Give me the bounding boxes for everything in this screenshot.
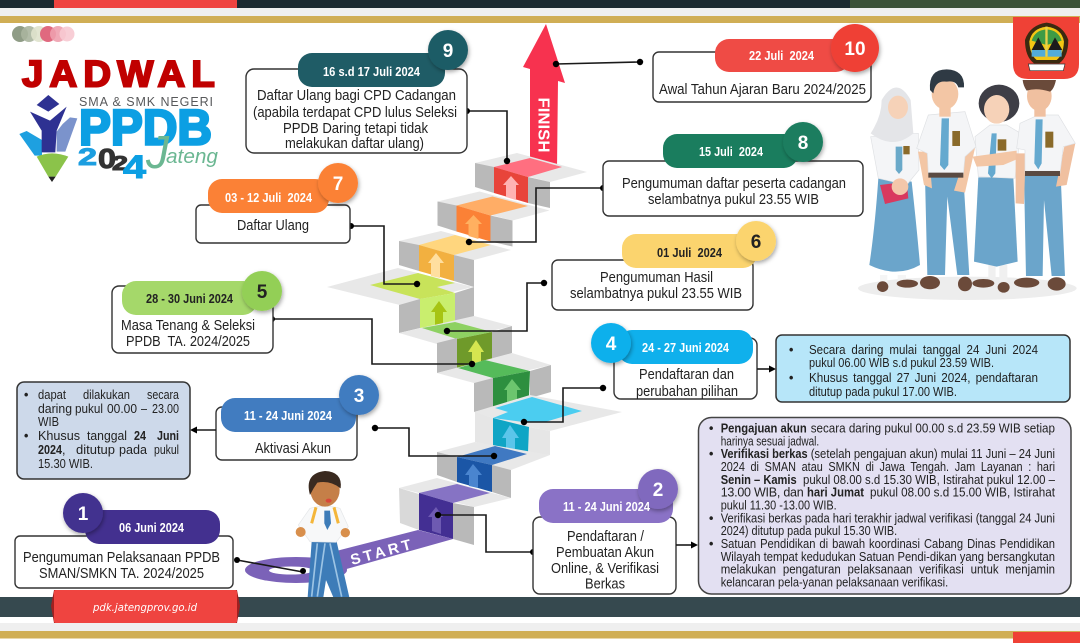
step blue (437, 442, 550, 498)
step 6 card (552, 221, 776, 310)
step 5 card: Masa Tenang & Seleksi (121, 318, 255, 334)
step 1 card: Pengumuman Pelaksanaan PPDB (23, 550, 220, 566)
start label: START (349, 536, 413, 569)
connector 1 (234, 557, 306, 574)
step 9 card: melakukan daftar ulang) (285, 136, 424, 152)
panel: step 3 details: pukul (154, 443, 179, 457)
panel: step 4 details: ditutup pada pukul 17.00 WIB. (809, 385, 957, 399)
panel: step 3 details: dapat (38, 388, 66, 402)
step 2 card: Pendaftaran / (567, 529, 645, 545)
panel: step 3 details: • (24, 429, 28, 443)
panel: step 2 details: pukul 08.00 s.d 15.30 WIB, Istirahat pukul 12.00 – (803, 473, 1055, 487)
panel: step 2 details: 13.00 WIB, dan (721, 486, 804, 500)
step 8 card: 15 Juli 2024 (699, 145, 763, 159)
arrow: step 3 to details (190, 426, 216, 434)
bottom footer bar (0, 590, 1080, 643)
step 5 card (112, 271, 282, 353)
title: JADWAL: JADWAL (22, 54, 221, 94)
panel: step 3 details: 24 (134, 429, 146, 443)
emblem tab: Jawa Tengah (1013, 17, 1079, 79)
step purple (399, 478, 511, 545)
step 4 card: 4 (606, 334, 617, 355)
panel: step 2 details: • (709, 537, 713, 551)
step 6 card: 6 (751, 232, 761, 253)
website tab (51, 590, 240, 623)
panel: step 3 details: Juni (157, 429, 179, 443)
panel: step 2 details: Senin – Kamis (721, 473, 797, 487)
step 10 card: Awal Tahun Ajaran Baru 2024/2025 (659, 82, 866, 98)
girl student (972, 85, 1021, 293)
step 10 card (653, 24, 879, 102)
step 7 card (196, 163, 358, 243)
boy student (917, 69, 976, 291)
step 1 card: SMAN/SMKN TA. 2024/2025 (39, 566, 204, 582)
connector 5 (269, 316, 475, 367)
step 4 card: 24 - 27 Juni 2024 (642, 341, 729, 355)
step green (437, 353, 551, 412)
step orange (438, 192, 550, 246)
step 2 card: Pembuatan Akun (556, 545, 654, 561)
step 4 card: perubahan pilihan (636, 384, 738, 400)
panel: step 3 details: Khusus (38, 429, 80, 443)
step red (475, 153, 587, 208)
step yellow (399, 231, 511, 287)
panel: step 3 details: 2024 (38, 443, 62, 457)
panel: step 2 details: (setelah pengajuan akun) mulai 11 Juni – 24 Juni (811, 447, 1055, 461)
panel: step 2 details: Verifikasi berkas (721, 447, 808, 461)
connector 3 (372, 425, 497, 459)
logo year 2024 (78, 143, 146, 185)
connector 7 (348, 223, 420, 287)
panel: step 2 details: • (709, 422, 713, 436)
step 3 card: Aktivasi Akun (255, 441, 331, 457)
step 2 card: Berkas (585, 576, 625, 592)
panel: step 3 details: WIB (38, 415, 59, 429)
connector 6 (444, 280, 547, 334)
step 7 card: 03 - 12 Juli 2024 (225, 191, 312, 205)
step 6 card: 01 Juli 2024 (657, 246, 722, 260)
panel: step 2 details: • (709, 511, 713, 525)
panel: step 4 details: • (789, 343, 793, 357)
panel: step 3 details: ditutup (76, 443, 115, 457)
website tab: pdk.jatengprov.go.id (92, 602, 197, 614)
panel: step 2 details: • (709, 447, 713, 461)
panel: step 3 details: 00.00 (107, 402, 137, 416)
panel: step 4 details (776, 335, 1070, 402)
connector 4 (521, 385, 606, 425)
subtitle: SMA & SMK Negeri: SMA & SMK NEGERI (79, 95, 213, 109)
connector 9 (464, 108, 510, 164)
panel: step 4 details: • (789, 371, 793, 385)
step olive (399, 316, 512, 373)
logo: Jadwal PPDB 2024 Jateng (19, 54, 221, 185)
staircase (327, 24, 622, 545)
step 1 card (15, 493, 233, 588)
panel: step 2 details: melakukan pengaturan pelaksanaan verifikasi untuk menjamin (721, 563, 1055, 577)
decorative dots (12, 26, 74, 42)
student walking figure (296, 471, 350, 597)
connector 8 (466, 185, 606, 245)
step cyan (474, 395, 622, 455)
panel: step 3 details (17, 382, 190, 479)
step 8 card (603, 122, 863, 216)
panel: step 3 details: daring (38, 402, 72, 416)
logo icon: graduates pencil (19, 95, 77, 182)
panel: step 3 details: tanggal (87, 429, 127, 443)
panel: step 4 details: pukul 06.00 WIB s.d pukul 23.59 WIB. (809, 356, 994, 370)
arrow: step 4 to details (757, 366, 776, 372)
step 8 card: 8 (798, 133, 808, 154)
panel: step 3 details: pada (119, 443, 147, 457)
arrow: step 2 to details (676, 542, 698, 548)
step 9 card: 9 (443, 41, 453, 62)
panel: step 3 details: – (141, 402, 147, 416)
step 5 card: PPDB TA. 2024/2025 (126, 334, 250, 350)
student with hijab (869, 87, 920, 292)
step 6 card: selambatnya pukul 23.55 WIB (570, 286, 742, 302)
logo word PPDB: PPDB (79, 100, 212, 156)
finish label: FINISH (534, 98, 552, 152)
panel: step 2 details: hari Jumat (807, 486, 865, 500)
panel: step 4 details: Khusus tanggal 27 Juni 2024, pendaftaran (809, 371, 1038, 385)
step 10 card: 22 Juli 2024 (749, 49, 814, 63)
logo script Jateng: ateng (166, 146, 218, 168)
panel: step 3 details: dilakukan (83, 388, 130, 402)
logo year 2024: 4 (123, 149, 146, 185)
connector 2 (435, 512, 536, 555)
step 3 card: 3 (354, 386, 364, 407)
step 4 card (591, 323, 757, 400)
logo year 2024: 2 (112, 153, 128, 175)
step 9 card: Daftar Ulang bagi CPD Cadangan (257, 88, 456, 104)
panel: step 3 details: secara (147, 388, 179, 402)
panel: step 3 details: pukul (75, 402, 103, 416)
panel: step 2 details: Pengajuan akun (721, 422, 807, 436)
panel: step 2 details: 2024) ditutup pada pukul 15.30 WIB. (721, 524, 897, 538)
connector lines (234, 59, 643, 574)
step 9 card (246, 30, 468, 153)
panel: step 2 details: pukul 08.00 s.d 15.00 WIB, Istirahat (870, 486, 1055, 500)
connector 10 (553, 59, 643, 67)
step 9 card: 16 s.d 17 Juli 2024 (323, 65, 420, 79)
panel: step 2 details (698, 418, 1071, 594)
step 5 card: 28 - 30 Juni 2024 (146, 292, 233, 306)
step 2 card: 11 - 24 Juni 2024 (563, 500, 650, 514)
panel: step 3 details: 15.30 WIB. (38, 457, 93, 471)
step 3 card: 11 - 24 Juni 2024 (244, 409, 332, 423)
step 3 card (216, 375, 379, 460)
panel: step 3 details: , (62, 443, 65, 457)
step lime landing (327, 268, 474, 333)
top header strip (0, 0, 1080, 23)
step 4 card: Pendaftaran dan (639, 367, 734, 383)
step 2 card (533, 469, 678, 594)
start ramp (245, 530, 453, 583)
student with glasses (1014, 80, 1075, 291)
step 8 card: selambatnya pukul 23.55 WIB (648, 192, 819, 208)
step 10 card: 10 (844, 39, 866, 60)
logo year 2024: 2 (78, 144, 97, 171)
step 1 card: 06 Juni 2024 (119, 521, 184, 535)
logo script Jateng: J (145, 126, 170, 178)
finish arrow (523, 24, 565, 169)
students group illustration (858, 69, 1077, 300)
step 7 card: Daftar Ulang (237, 218, 309, 234)
panel: step 4 details: Secara daring mulai tanggal 24 Juni 2024 (809, 343, 1038, 357)
step 1 card: 1 (78, 504, 89, 525)
panel: step 2 details: kelancaran pela-yanan pelaksanaan verifikasi. (721, 576, 948, 590)
panel: step 2 details: harinya sesuai jadwal. (721, 434, 819, 448)
step 8 card: Pengumuman daftar peserta cadangan (622, 176, 846, 192)
panel: step 3 details: 23.00 (152, 402, 179, 416)
logo year 2024: 0 (98, 143, 116, 174)
step 7 card: 7 (333, 174, 343, 195)
step 9 card: PPDB Daring tetapi tidak (283, 121, 429, 137)
panel: step 3 details: • (24, 388, 28, 402)
step 2 card: Online, & Verifikasi (551, 561, 659, 577)
step 9 card: (apabila terdapat CPD lulus Seleksi (253, 105, 457, 121)
step 2 card: 2 (653, 480, 663, 501)
step 5 card: 5 (257, 282, 268, 303)
step 6 card: Pengumuman Hasil (600, 270, 713, 286)
panel: step 2 details: pukul 11.30 -13.00 WIB. (721, 498, 837, 512)
panel: step 2 details: secara daring pukul 00.00 s.d 23.59 WIB setiap (811, 422, 1055, 436)
